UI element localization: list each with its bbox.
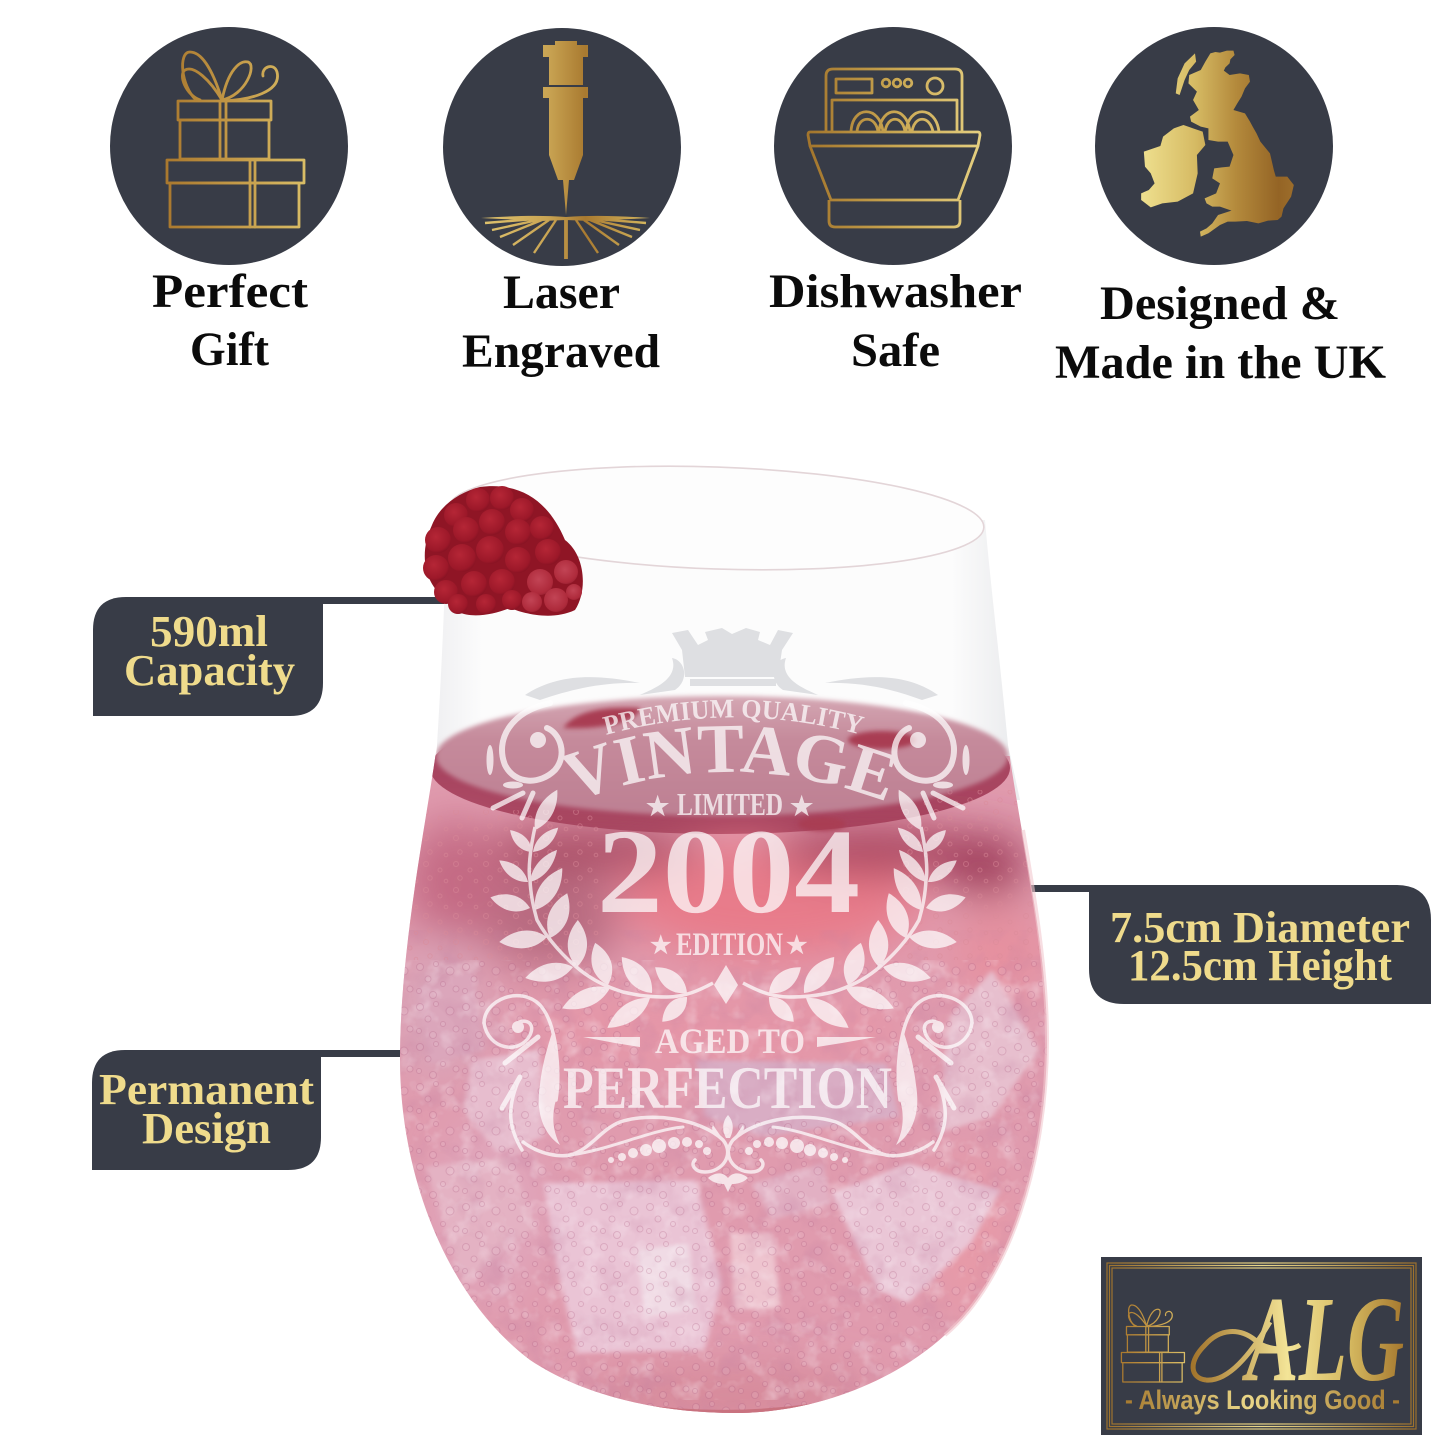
heading: Laser Engraved: Laser (503, 266, 620, 319)
icon: laser engraver head (481, 41, 650, 259)
engraving: Aged to: AGED TO (655, 1021, 805, 1061)
icon circle: laser (443, 28, 681, 266)
panel: laser engraved feature (443, 28, 681, 378)
brand logo (1101, 1257, 1422, 1435)
glass upper body (437, 520, 1020, 800)
glass base (650, 1403, 814, 1413)
panel: designed and made in UK feature (1055, 27, 1386, 389)
heading: Designed and Made in the UK: Designed & (1100, 277, 1340, 330)
heading: Perfect Gift: Gift (190, 323, 269, 376)
icon circle: dishwasher (774, 27, 1012, 265)
engraving: design artwork (482, 700, 974, 1192)
heading: Dishwasher Safe (769, 265, 1022, 377)
engraving: center diamond (714, 965, 738, 1004)
engraving: Limited: ★ (790, 792, 814, 821)
icon: stacked gift boxes (167, 52, 304, 227)
heading: Perfect Gift (152, 265, 308, 376)
callout: permanent design: Design (142, 1104, 271, 1153)
engraving: left laurel and scrolls (484, 703, 728, 1192)
glass rim (446, 458, 986, 578)
callout: dimensions: 12.5cm Height (1128, 941, 1392, 990)
callout: capacity (93, 597, 445, 716)
callout: capacity: 590ml (150, 607, 268, 656)
engraving: year 2004: 2004 (597, 805, 860, 939)
logo monogram (1193, 1272, 1404, 1407)
engraving: crown (525, 628, 938, 700)
engraving: right laurel and scrolls (728, 703, 972, 1192)
heading: Dishwasher Safe: Safe (851, 324, 940, 377)
heading: Laser Engraved (462, 266, 660, 378)
callout: dimensions (1029, 885, 1431, 1004)
icon circle: gift (110, 27, 348, 265)
pale mottled texture (395, 960, 1055, 1400)
logo panel (1101, 1257, 1422, 1435)
logo tagline: - Always Looking Good - (1125, 1385, 1400, 1415)
logo icon: gift (1121, 1305, 1184, 1382)
panel: dishwasher safe feature (769, 27, 1022, 377)
heading: Dishwasher Safe: Dishwasher (769, 265, 1022, 318)
heading: Perfect Gift: Perfect (152, 265, 308, 318)
drink surface (436, 696, 1008, 816)
engraving: arched text: VINTAGE (564, 726, 894, 800)
glass with pink drink (400, 465, 1049, 1413)
icon: map of UK and Ireland (1141, 51, 1294, 237)
callout: capacity: Capacity (124, 646, 295, 695)
engraving: Edition: EDITION (676, 927, 783, 963)
right edge sheen (945, 830, 1047, 1335)
heading: Laser Engraved: Engraved (462, 325, 660, 378)
raspberry garnish (423, 486, 583, 616)
callout: permanent design: Permanent (99, 1065, 314, 1114)
engraving: Limited: ★ (646, 792, 670, 821)
logo frame (1107, 1263, 1416, 1429)
fruit in drink (563, 708, 916, 831)
engraving: Perfection: PERFECTION (563, 1055, 892, 1121)
engraving: Limited: LIMITED (677, 786, 783, 822)
engraving: dashes (583, 1037, 876, 1047)
mottled texture (432, 959, 1022, 1340)
heading: Designed and Made in the UK (1055, 277, 1386, 389)
bubbles (400, 960, 1050, 1420)
engraving: arched text: PREMIUM QUALITY (602, 700, 865, 735)
icon circle: UK map (1095, 27, 1333, 265)
engraving: Edition: ★ (786, 933, 808, 959)
engraving: Edition: ★ (650, 933, 672, 959)
callout: dimensions: 7.5cm Diameter (1110, 903, 1410, 952)
ice cubes (417, 970, 1039, 1353)
icon: dishwasher (808, 69, 980, 227)
drink liquid (390, 696, 1060, 1426)
heading: Designed and Made in the UK: Made in the UK (1055, 336, 1386, 389)
callout: permanent design (92, 1050, 401, 1170)
panel: perfect gift feature (110, 27, 348, 376)
